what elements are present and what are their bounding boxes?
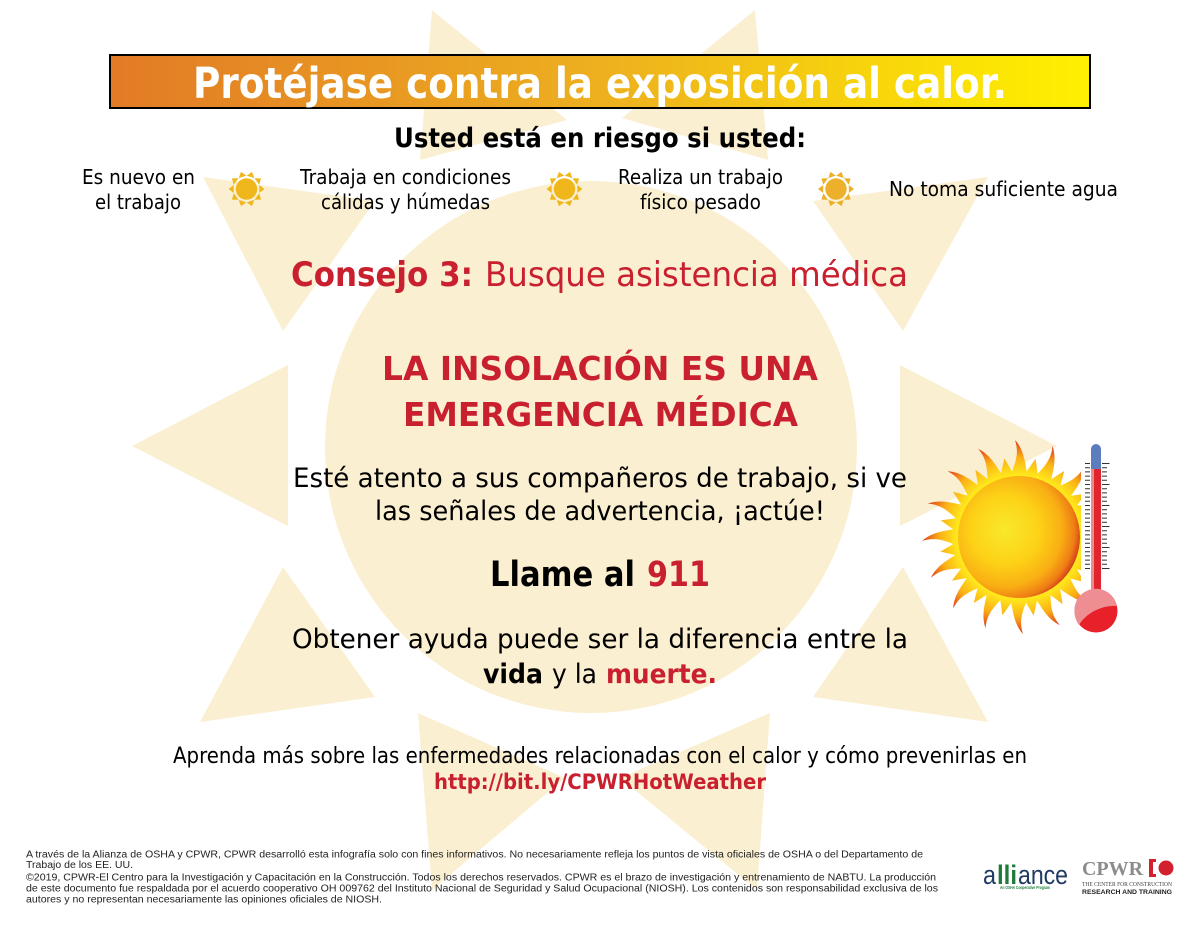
title banner: Protéjase contra la exposición al calor. xyxy=(193,59,1007,109)
disclaimer footer: ©2019, CPWR-El Centro para la Investigación y Capacitación en la Construcción. Todos los derechos reservados. CPWR es el brazo de investigación y entrenamiento de NABTU. La producción xyxy=(26,872,936,884)
risk factor: hot and humid conditions xyxy=(299,165,511,214)
disclaimer footer: de este documento fue respaldada por el acuerdo cooperativo OH 009762 del Instituto Nacional de Seguridad y Salud Ocupacional (NIOSH). Los contenidos son responsabilidad exclusiva de los xyxy=(26,884,938,894)
icon: small sun 1 xyxy=(228,171,264,207)
icon: small sun 2 xyxy=(546,171,582,207)
watch coworkers text: Esté atento a sus compañeros de trabajo, si ve xyxy=(293,463,907,494)
logo: CPWR: CPWR xyxy=(1082,858,1144,880)
call 911: 911 xyxy=(647,555,710,595)
risk factor: hot and humid conditions: Trabaja en condiciones xyxy=(299,165,511,189)
learn more text xyxy=(173,744,1027,794)
risk factor: heavy physical work: Realiza un trabajo xyxy=(618,165,783,189)
life and death text xyxy=(292,624,908,690)
background sun xyxy=(132,10,1057,890)
learn more text: http://bit.ly/CPWRHotWeather xyxy=(434,770,767,794)
call 911: Llame al xyxy=(490,555,635,595)
watch coworkers text xyxy=(293,463,907,527)
logo: CPWR xyxy=(1082,858,1174,896)
tip heading: Busque asistencia médica xyxy=(485,255,908,295)
logo: alliance: ance xyxy=(1018,860,1068,890)
disclaimer footer: Trabajo de los EE. UU. xyxy=(26,860,133,871)
disclaimer footer: autores y no representan necesariamente las opiniones oficiales de NIOSH. xyxy=(26,894,382,906)
tip heading xyxy=(291,255,908,295)
disclaimer footer: A través de la Alianza de OSHA y CPWR, CPWR desarrolló esta infografía solo con fines informativos. No necesariamente refleja los puntos de vista oficiales de OSHA o del Departamento de xyxy=(26,850,923,860)
logo: alliance: a xyxy=(983,860,997,890)
tip heading: Consejo 3: xyxy=(291,255,473,295)
risk factor: heavy physical work xyxy=(618,165,783,214)
emergency heading: LA INSOLACIÓN ES UNA xyxy=(382,348,818,388)
life and death text: y la xyxy=(552,659,597,690)
life and death text: muerte. xyxy=(606,659,717,690)
life and death text: vida xyxy=(483,659,543,690)
disclaimer footer xyxy=(26,850,938,906)
icon: thermometer xyxy=(1074,444,1118,632)
life and death text: Obtener ayuda puede ser la diferencia entre la xyxy=(292,624,908,655)
learn more text: Aprenda más sobre las enfermedades relacionadas con el calor y cómo prevenirlas en xyxy=(173,744,1027,769)
risk factor: new on the job: Es nuevo en xyxy=(82,165,195,189)
logo: CPWR: THE CENTER FOR CONSTRUCTION xyxy=(1082,881,1172,888)
subheading: Usted está en riesgo si usted: xyxy=(394,123,806,154)
logo: alliance: An OSHA Cooperative Program xyxy=(1000,885,1050,890)
watch coworkers text: las señales de advertencia, ¡actúe! xyxy=(375,496,825,527)
logo: alliance: lli xyxy=(997,860,1017,890)
risk factor: new on the job xyxy=(82,165,195,214)
risk factor: not enough water: No toma suficiente agua xyxy=(889,177,1118,201)
risk factor: new on the job: el trabajo xyxy=(95,190,181,214)
emergency heading xyxy=(382,348,818,434)
risk factor: heavy physical work: físico pesado xyxy=(640,190,761,214)
logo: alliance xyxy=(983,860,1068,890)
icon: small sun 3 xyxy=(818,171,854,207)
icon: sun illustration xyxy=(922,440,1081,634)
risk factor: hot and humid conditions: cálidas y húmedas xyxy=(321,190,490,214)
emergency heading: EMERGENCIA MÉDICA xyxy=(403,394,798,434)
logo: CPWR: RESEARCH AND TRAINING xyxy=(1082,890,1172,896)
